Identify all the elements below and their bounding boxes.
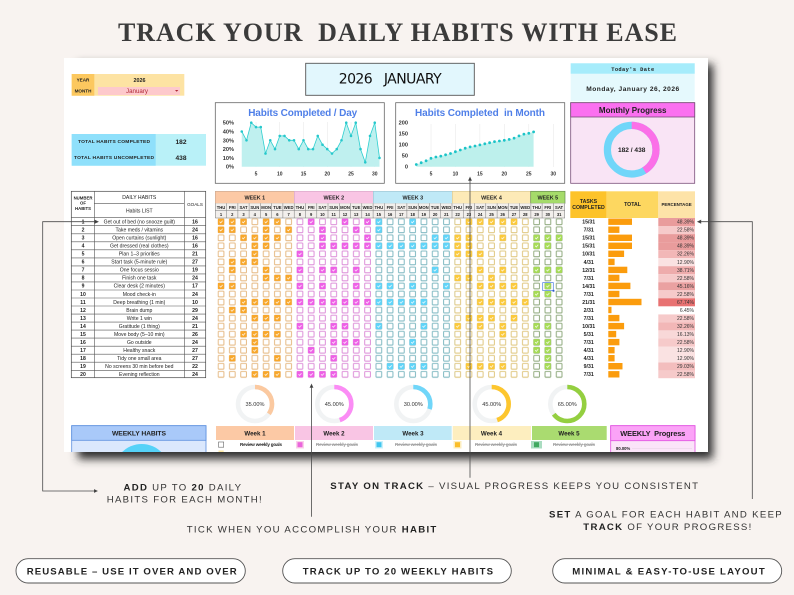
percentage column: 22.58%: [677, 292, 695, 298]
chart: habits completed in month: 20: [502, 172, 507, 178]
panel: daily habits list: [71, 191, 206, 378]
panel: checkbox grid: [218, 218, 567, 379]
panel: monthly progress: [571, 103, 695, 183]
chart: habits completed per day: 20%: [223, 147, 234, 153]
day names: SAT: [397, 205, 406, 210]
arrow: tick when accomplished: [310, 384, 313, 517]
panel: tasks completed, total, percentage: [570, 191, 695, 378]
habit rows: Get out of bed (no snooze guilt): [104, 220, 175, 226]
arrow: stay on track: [469, 178, 471, 478]
day names: TUE: [352, 205, 361, 210]
habit rows: 29: [192, 308, 198, 314]
percentage column: 22.58%: [677, 372, 695, 378]
selected cell: [543, 283, 554, 292]
day names: THU: [374, 205, 383, 210]
chart: habits completed in month: 100: [399, 143, 408, 149]
habit rows: 10: [80, 292, 86, 298]
percentage column: 29.03%: [677, 364, 695, 370]
day names: FRI: [229, 205, 236, 210]
habit rows: Healthy snack: [123, 348, 156, 354]
callout: tick when you accomplish: TICK WHEN YOU ACCOMPLISH YOUR HABIT: [187, 524, 436, 535]
panel: weekly goals: Week 2: [323, 430, 345, 438]
habit rows: 27: [192, 260, 198, 266]
tasks completed column: 10/31: [582, 324, 595, 330]
tasks completed column: 12/31: [582, 268, 595, 274]
day names: WED: [363, 205, 372, 210]
tasks completed column: [582, 220, 595, 378]
pill: reusable: REUSABLE – USE IT OVER AND OVER: [27, 566, 237, 577]
day numbers: 30: [546, 212, 551, 217]
ticked: week 3: [376, 219, 449, 369]
donut: week 4: 45.00%: [482, 402, 501, 408]
day names: THU: [217, 205, 225, 210]
panel: year and month selector: 2026: [134, 78, 146, 84]
habit rows: Go outside: [127, 340, 152, 346]
day names: THU: [532, 205, 541, 210]
percentage column: 6.45%: [680, 308, 695, 314]
panel: totals: 182: [175, 139, 187, 146]
day numbers: 11: [332, 212, 337, 217]
day numbers: 13: [354, 212, 359, 217]
chart: habits completed in month: 5: [430, 172, 433, 178]
panel: today's date: [571, 63, 695, 101]
percentage column: 12.90%: [677, 348, 695, 354]
chart: habits completed in month: 50: [402, 154, 408, 160]
tasks completed column: 7/31: [584, 316, 594, 322]
day numbers: 5: [265, 212, 268, 217]
tasks completed column: 9/31: [584, 364, 594, 370]
donut: monthly progress: 182 / 438: [618, 147, 646, 154]
donut: week 2: [317, 387, 351, 421]
habit rows: Evening reflection: [119, 372, 160, 378]
day names: THU: [296, 205, 304, 210]
habit rows: Write 1 win: [127, 316, 152, 322]
chart: habits completed per day: [215, 103, 384, 183]
day names: FRI: [544, 205, 551, 210]
percentage column: [658, 218, 695, 378]
day numbers: 14: [365, 212, 370, 217]
day numbers: 10: [320, 212, 325, 217]
day names: TUE: [431, 205, 439, 210]
panel: weekly goals: Review weekly goals: [475, 442, 517, 447]
habit rows: 6: [82, 260, 85, 266]
panel: week headers: [215, 191, 565, 218]
day numbers: 15: [377, 212, 382, 217]
panel: tasks completed, total, percentage: TASKS: [580, 199, 598, 205]
title: TRACK YOUR DAILY HABITS WITH EASE: [118, 18, 677, 47]
tasks completed column: 14/31: [582, 284, 595, 290]
day numbers: 31: [557, 212, 562, 217]
panel: weekly goals: Review weekly goals: [240, 442, 282, 447]
chart: habits completed per day: 5: [255, 172, 258, 178]
habit rows: [80, 220, 198, 378]
habit rows: Finish one task: [122, 276, 157, 282]
habit rows: 24: [192, 316, 198, 322]
day names: WED: [442, 205, 451, 210]
weekly donut charts: [238, 387, 584, 421]
day names: SAT: [239, 205, 248, 210]
panel: year and month selector: [72, 74, 184, 96]
pill: minimal layout: [553, 559, 782, 583]
panel: weekly goals: Week 4: [481, 430, 503, 438]
habit rows: 12: [80, 308, 86, 314]
percentage column: 32.26%: [677, 324, 695, 330]
percentage column: 45.16%: [677, 284, 695, 290]
callout: set a goal: TRACK OF YOUR PROGRESS!: [583, 522, 751, 533]
day numbers: 26: [500, 212, 506, 217]
habit rows: 24: [192, 228, 198, 234]
arrow: add daily habits: [43, 220, 98, 492]
panel: totals: TOTAL HABITS UNCOMPLETED: [74, 155, 154, 161]
tasks completed column: 4/31: [584, 348, 594, 354]
habit rows: 18: [80, 356, 86, 362]
habit rows: Start task (5-minute rule): [111, 260, 168, 266]
habit rows: 20: [80, 372, 86, 378]
habit rows: 19: [192, 268, 198, 274]
panel: weekly progress: WEEKLY Progress: [620, 429, 685, 438]
day names: FRI: [387, 205, 393, 210]
day numbers: 16: [388, 212, 393, 217]
panel: tasks completed, total, percentage: PERCENTAGE: [662, 202, 692, 207]
habit rows: 16: [192, 236, 198, 242]
pill: weekly habits: [283, 559, 511, 583]
day numbers: 25: [489, 212, 494, 217]
day numbers: 18: [410, 212, 416, 217]
tasks completed column: 7/31: [584, 340, 594, 346]
panel: week headers: WEEK 3: [402, 196, 423, 202]
panel: year and month selector: January: [126, 88, 149, 95]
panel: daily habits list: GOALS: [187, 202, 203, 207]
day numbers: 19: [422, 212, 427, 217]
panel: week headers: WEEK 5: [537, 196, 558, 202]
panel: daily habits list: Habits LIST: [126, 208, 153, 214]
arrow: set a goal: [698, 220, 752, 499]
panel: today's date: Monday, January 26, 2026: [586, 86, 680, 93]
day names: SUN: [329, 205, 338, 210]
chart: habits completed in month: 10: [453, 172, 458, 178]
day names: MON: [340, 205, 350, 210]
day names: MON: [419, 205, 429, 210]
chart: habits completed per day: 10%: [223, 156, 234, 162]
panel: week headers: WEEK 2: [323, 196, 344, 202]
day numbers: 27: [512, 212, 517, 217]
callout: set a goal: SET A GOAL FOR EACH HABIT AND KEEP: [549, 509, 782, 520]
habit rows: 15: [80, 332, 86, 338]
habit rows: 24: [192, 292, 198, 298]
day numbers: 2: [231, 212, 234, 217]
habit rows: Tidy one small area: [117, 356, 162, 362]
chart: habits completed per day: 40%: [223, 130, 234, 136]
chart: habits completed in month: [396, 103, 565, 183]
percentage column: 12.90%: [677, 260, 695, 266]
donut: week 1: 35.00%: [246, 402, 265, 408]
panel: year and month selector: MONTH: [75, 88, 92, 94]
chart: habits completed in month: 30: [551, 172, 556, 178]
day names: TUE: [510, 205, 518, 210]
day numbers: 12: [343, 212, 348, 217]
donut: week 3: 30.00%: [404, 402, 423, 408]
panel: week headers: WEEK 1: [244, 196, 265, 202]
habit rows: 24: [192, 340, 198, 346]
percentage column: 22.58%: [677, 340, 695, 346]
chart: habits completed in month: 25: [526, 172, 532, 178]
habit rows: 21: [192, 324, 198, 330]
habit rows: 2: [82, 228, 85, 234]
day numbers: [220, 212, 562, 217]
panel: weekly goals: Review weekly goals: [553, 442, 595, 447]
day names: SUN: [487, 205, 496, 210]
panel: weekly goals: Week 1: [244, 430, 266, 438]
chart: habits completed per day: 25: [348, 172, 354, 178]
tasks completed column: 15/31: [582, 244, 595, 250]
percentage column: 48.39%: [677, 236, 695, 242]
habit rows: 13: [80, 316, 86, 322]
day numbers: 17: [399, 212, 404, 217]
habit rows: Brain dump: [126, 308, 152, 314]
day numbers: 6: [276, 212, 279, 217]
panel: tasks completed, total, percentage: TOTAL: [624, 202, 642, 208]
day numbers: 1: [220, 212, 223, 217]
habit rows: 21: [192, 252, 198, 258]
day numbers: 29: [534, 212, 540, 217]
chart: habits completed in month: 200: [399, 121, 408, 127]
day numbers: 8: [299, 212, 302, 217]
chart: habits completed per day: 10: [277, 172, 283, 178]
day numbers: 9: [310, 212, 313, 217]
day numbers: 21: [444, 212, 449, 217]
pill: minimal layout: MINIMAL & EASY-TO-USE LAYOUT: [572, 566, 765, 577]
day names: WED: [284, 205, 293, 210]
tasks completed column: 7/31: [584, 372, 594, 378]
day numbers: 23: [467, 212, 472, 217]
habit rows: 22: [192, 364, 198, 370]
panel: year and month selector: YEAR: [77, 78, 90, 82]
habit rows: 26: [192, 332, 198, 338]
day names: MON: [498, 205, 508, 210]
panel: daily habits list: DAILY HABITS: [122, 195, 157, 201]
percentage column: 48.39%: [677, 220, 695, 226]
panel: weekly habits: WEEKLY HABITS: [112, 431, 166, 438]
tasks completed column: 10/31: [582, 252, 595, 258]
panel: totals: [72, 134, 206, 166]
donut: week 1: [238, 387, 272, 421]
habit rows: 9: [82, 284, 85, 290]
panel: totals: 438: [175, 155, 187, 162]
habit rows: 16: [80, 340, 86, 346]
donut: week 3: [396, 387, 430, 421]
chart title: Habits Completed / Day: [248, 108, 358, 119]
day numbers: 3: [242, 212, 245, 217]
panel: weekly progress: [610, 425, 696, 452]
panel: week headers: WEEK 4: [481, 196, 502, 202]
habit rows: Plan 1–3 priorities: [119, 252, 160, 258]
pill: reusable: [16, 559, 245, 583]
chart: habits completed per day: 0%: [226, 165, 234, 171]
panel: habit tracker spreadsheet: [64, 58, 708, 452]
panel: weekly goals: [216, 426, 607, 452]
panel: month title box: [306, 63, 474, 95]
callout: add up to 20 daily habits: HABITS FOR EACH MONTH!: [107, 495, 262, 506]
habit rows: 1: [82, 220, 85, 226]
habit rows: 14: [80, 324, 86, 330]
tasks completed column: 4/31: [584, 356, 594, 362]
chart title: Habits Completed in Month: [415, 108, 545, 119]
panel: monthly progress: Monthly Progress: [599, 106, 667, 115]
panel: daily habits list: OF: [80, 201, 86, 206]
tasks completed column: 2/31: [584, 308, 594, 314]
ticked: week 1: [218, 219, 292, 377]
tasks completed column: 5/31: [584, 332, 594, 338]
habit rows: 16: [192, 220, 198, 226]
percentage column: 22.58%: [677, 228, 695, 234]
panel: tasks completed, total, percentage: COMPLETED: [572, 205, 605, 211]
day numbers: 4: [254, 212, 257, 217]
habit rows: One focus sessio: [120, 268, 159, 274]
day names: SAT: [476, 205, 485, 210]
tasks completed column: 7/31: [584, 276, 594, 282]
panel: weekly goals: Week 5: [558, 430, 580, 438]
chart: habits completed per day: 50%: [223, 121, 234, 127]
habit rows: Open curtains (sunlight): [112, 236, 167, 242]
chart: habits completed in month: 15: [477, 172, 483, 178]
day names: SAT: [555, 205, 564, 210]
donut: week 5: [550, 387, 584, 421]
tasks completed column: 7/31: [584, 228, 594, 234]
day names: [217, 205, 564, 210]
percentage column: 67.74%: [677, 300, 695, 306]
habit rows: Get dressed (real clothes): [110, 244, 169, 250]
chart: habits completed in month: 0: [405, 165, 408, 171]
habit rows: 17: [192, 284, 198, 290]
panel: weekly goals: Review weekly goals: [316, 442, 358, 447]
chart: habits completed per day: 15: [301, 172, 306, 178]
habit rows: 11: [80, 300, 86, 306]
habit rows: 3: [82, 236, 85, 242]
panel: daily habits list: NUMBER: [74, 196, 93, 200]
sheet shadow: [78, 64, 713, 459]
callout: set a goal: [549, 509, 782, 533]
day numbers: 20: [433, 212, 438, 217]
ticked: week 5: [534, 235, 562, 369]
chart: habits completed in month: 150: [399, 132, 408, 138]
day names: TUE: [273, 205, 282, 210]
chart: habits completed per day: 20: [324, 172, 330, 178]
donut: week 2: 45.00%: [325, 402, 344, 408]
panel: weekly progress: 80.00%: [616, 446, 630, 451]
day names: FRI: [466, 205, 472, 210]
percentage column: 22.58%: [677, 316, 695, 322]
habit rows: 24: [192, 372, 198, 378]
tasks completed column: 15/31: [582, 220, 595, 226]
day names: MON: [261, 205, 271, 210]
ticked: week 4: [455, 219, 528, 369]
habit rows: 10: [192, 300, 198, 306]
percentage column: 22.58%: [677, 276, 695, 282]
panel: totals: TOTAL HABITS COMPLETED: [78, 139, 150, 145]
habit rows: 5: [82, 252, 85, 258]
percentage column: 48.39%: [677, 244, 695, 250]
pill: weekly habits: TRACK UP TO 20 WEEKLY HABITS: [303, 566, 494, 577]
day numbers: 22: [455, 212, 461, 217]
percentage column: 12.90%: [677, 356, 695, 362]
percentage column: 32.26%: [677, 252, 695, 258]
day names: SUN: [250, 205, 259, 210]
total bars: [608, 218, 642, 378]
habit rows: 17: [80, 348, 86, 354]
day names: FRI: [308, 205, 315, 210]
panel: weekly goals: Review weekly goals: [395, 442, 437, 447]
panel: today's date: Today's Date: [611, 67, 654, 73]
habit rows: Move body (5–10 min): [114, 332, 165, 338]
day numbers: 28: [523, 212, 528, 217]
habit rows: 19: [80, 364, 86, 370]
panel: daily habits list: HABITS: [75, 206, 91, 211]
donut: week 5: 65.00%: [558, 402, 577, 408]
habit rows: 27: [192, 356, 198, 362]
chart: habits completed per day: 30: [372, 172, 378, 178]
callout: stay on track: STAY ON TRACK – VISUAL PROGRESS KEEPS YOU CONSISTENT: [330, 481, 698, 492]
donut: week 4: [475, 387, 509, 421]
habit rows: Gratitude (1 thing): [119, 324, 160, 330]
panel: weekly habits: [71, 425, 206, 452]
day names: WED: [520, 205, 530, 210]
habit rows: Deep breathing (1 min): [113, 300, 166, 306]
percentage column: 38.71%: [677, 268, 695, 274]
habit rows: Take meds / vitamins: [116, 228, 164, 234]
habit rows: Mood check-in: [123, 292, 156, 298]
tasks completed column: 7/31: [584, 292, 594, 298]
tasks completed column: 21/31: [582, 300, 595, 306]
habit rows: Clear desk (2 minutes): [114, 284, 165, 290]
callout: add up to 20 daily habits: ADD UP TO 20 DAILY: [124, 482, 242, 493]
day names: SUN: [408, 205, 417, 210]
percentage column: 16.13%: [677, 332, 695, 338]
callout: add up to 20 daily habits: [107, 482, 262, 506]
panel: weekly goals: Week 3: [402, 430, 424, 438]
habit rows: 27: [192, 348, 198, 354]
day numbers: 24: [478, 212, 483, 217]
habit rows: 16: [192, 244, 198, 250]
habit rows: 7: [82, 268, 85, 274]
day names: SAT: [318, 205, 327, 210]
habit rows: 4: [82, 244, 85, 250]
tasks completed column: 15/31: [582, 236, 595, 242]
habit rows: No screens 30 min before bed: [105, 364, 174, 370]
day names: THU: [453, 205, 462, 210]
tasks completed column: 4/31: [584, 260, 594, 266]
chart: habits completed per day: 30%: [223, 138, 234, 144]
ticked: week 2: [297, 219, 370, 377]
day numbers: 7: [287, 212, 290, 217]
habit rows: 8: [82, 276, 85, 282]
panel: month title box: 2026 JANUARY: [339, 72, 442, 88]
habit rows: 24: [192, 276, 198, 282]
